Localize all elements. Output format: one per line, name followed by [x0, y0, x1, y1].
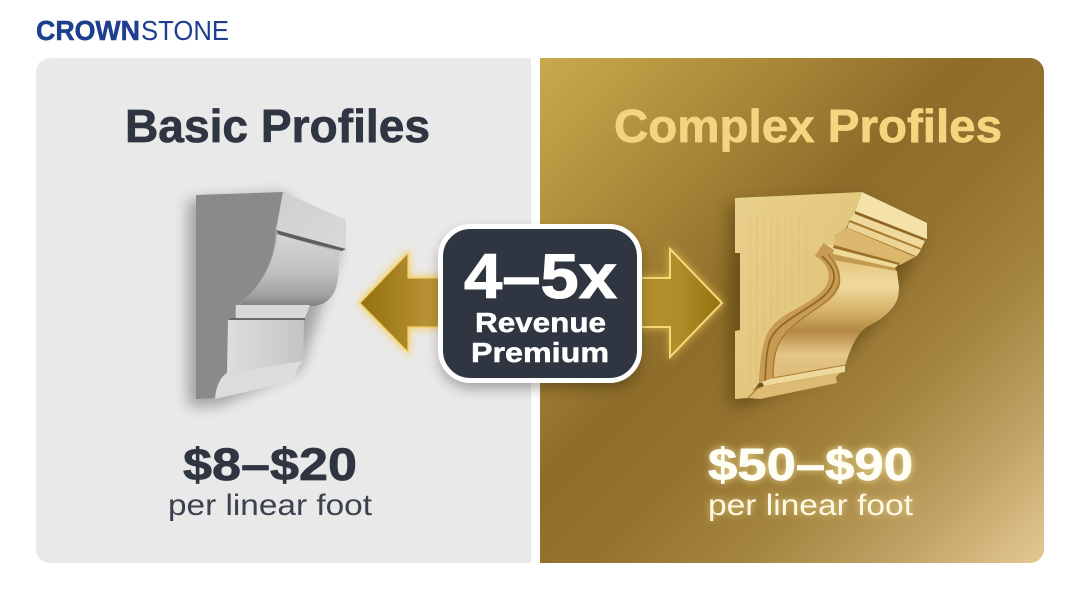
badge value: 4–5x: 4–5x — [464, 242, 617, 312]
upper cove — [834, 228, 915, 265]
panel: complex profiles — [540, 58, 1044, 563]
price: $50–$90: $50–$90 — [708, 439, 913, 490]
badge label: premium: Premium — [471, 337, 609, 368]
arrow: left — [360, 253, 445, 352]
logo: CROWNSTONE — [36, 15, 229, 46]
cornice step 2 — [847, 222, 921, 257]
panel: basic profiles — [36, 58, 531, 563]
icon: grey basic moulding — [188, 192, 346, 406]
cornice step 3 — [824, 243, 900, 268]
logo: CROWNSTONE: CROWN — [36, 15, 140, 46]
back face — [735, 192, 862, 399]
logo: CROWNSTONE: STONE — [141, 15, 229, 46]
badge label: revenue: Revenue — [475, 307, 606, 338]
price: $8–$20: $8–$20 — [183, 439, 357, 490]
badge: 4–5x revenue premium — [440, 226, 640, 388]
top face — [855, 192, 927, 239]
icon: gold ornate moulding — [728, 192, 927, 406]
main cove — [772, 260, 899, 378]
label: per linear foot: per linear foot — [168, 489, 373, 522]
heading: Basic Profiles: Basic Profiles — [125, 100, 430, 152]
label: per linear foot: per linear foot — [708, 489, 914, 522]
heading: Complex Profiles: Complex Profiles — [614, 100, 1002, 152]
cornice step 1 — [849, 211, 926, 249]
label: per linear foot: per linear foot — [708, 489, 914, 522]
base bands — [762, 365, 845, 386]
arrow: right — [635, 249, 722, 357]
rim detail — [759, 243, 840, 383]
price: $50–$90: $50–$90 — [708, 439, 913, 490]
